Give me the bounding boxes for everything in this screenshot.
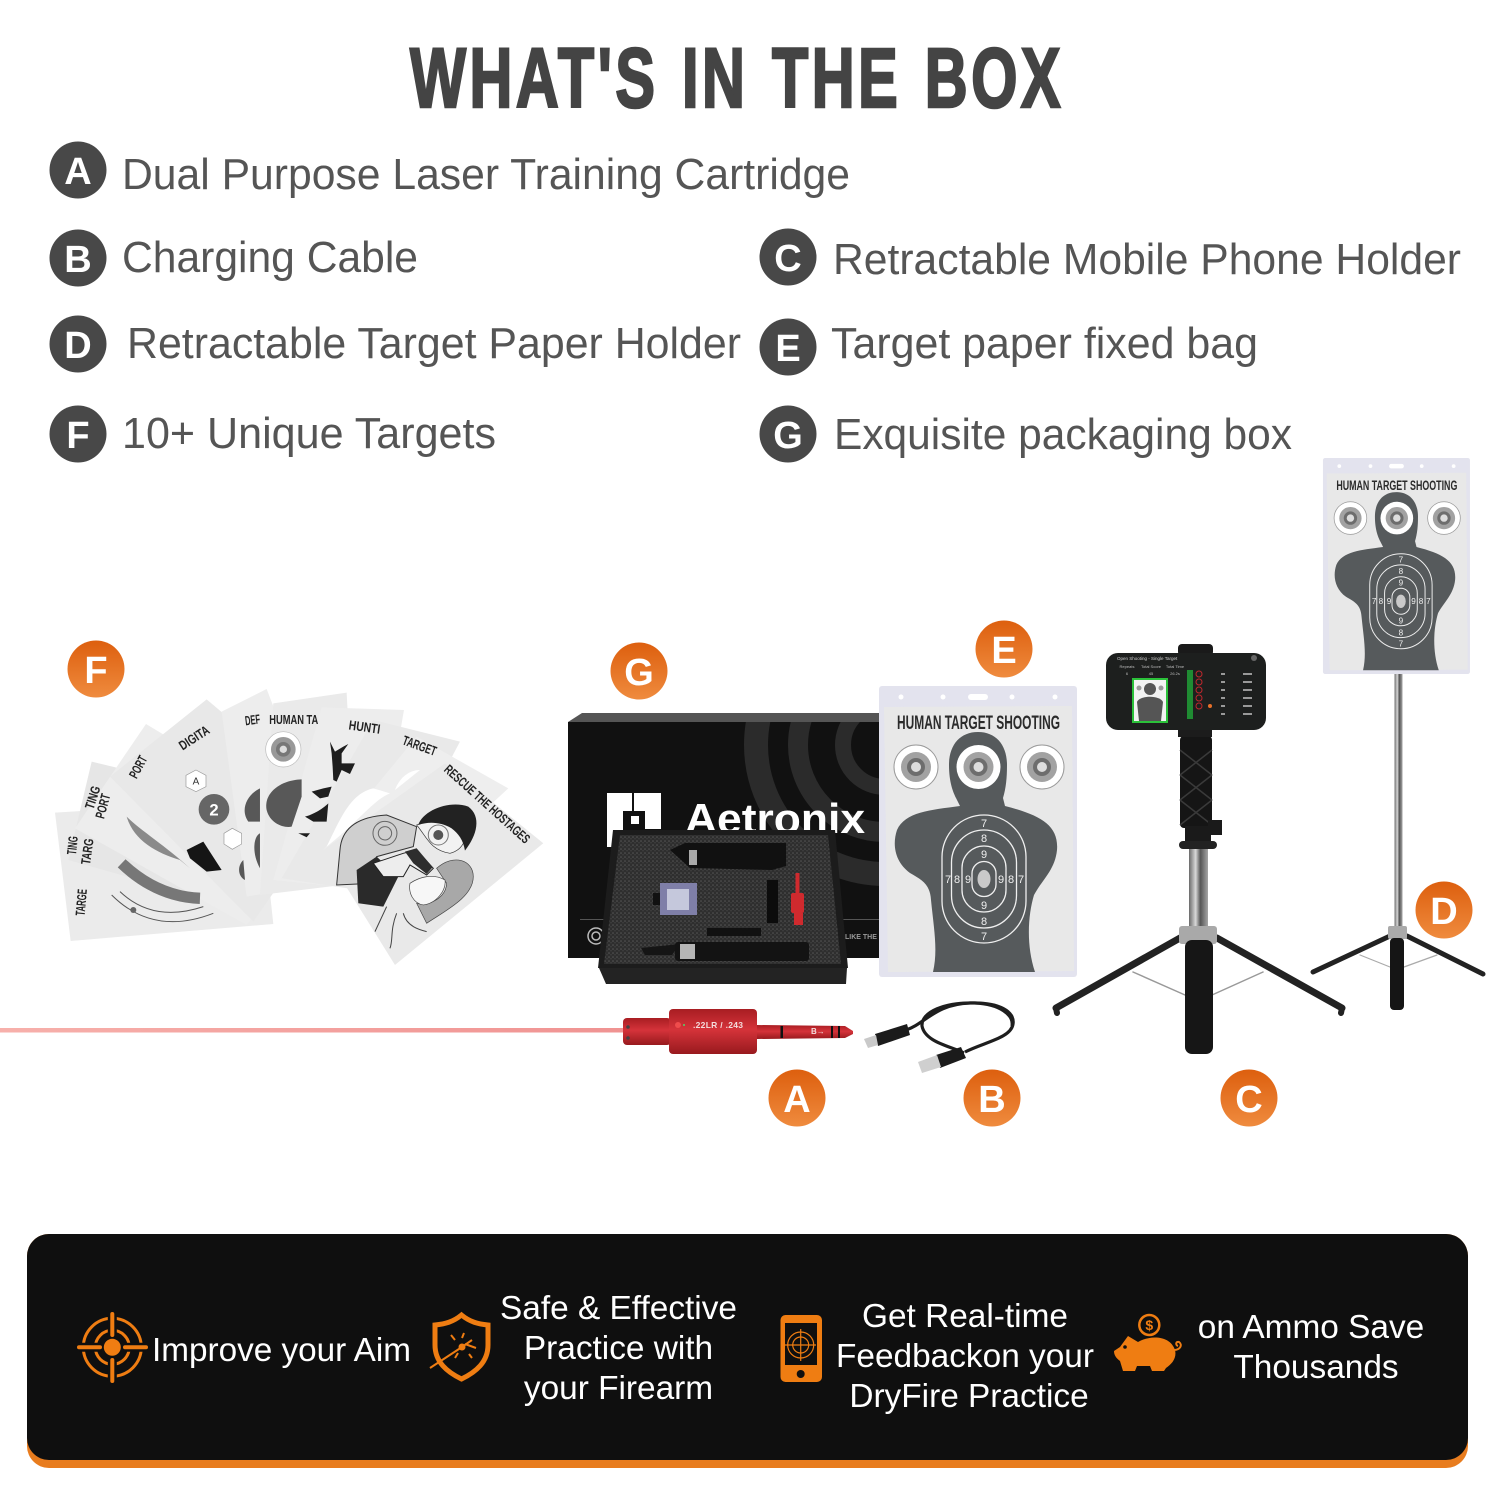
numbered hexagons — [186, 770, 242, 849]
benefit text: improve aim: Improve your Aim — [152, 1332, 411, 1369]
item C badge — [760, 228, 816, 286]
panel: benefits bar — [27, 1234, 1468, 1468]
E: target in fixed bag: 9 — [981, 900, 987, 912]
target on the stand — [1323, 458, 1470, 674]
target on the stand: 8 — [1399, 567, 1404, 576]
E: target in fixed bag: 7 — [945, 874, 951, 886]
benefit text: real-time feedback: Feedbackon your — [836, 1338, 1094, 1375]
card titles: TARGET — [401, 733, 439, 759]
target on the stand: 9 — [1399, 579, 1404, 588]
E: target in fixed bag: 8 — [954, 874, 960, 886]
item B badge: B — [64, 239, 92, 281]
E: target in fixed bag: 9 — [981, 849, 987, 861]
item E badge — [760, 318, 816, 376]
target on the stand: 7 — [1399, 556, 1404, 565]
card titles: PORT — [92, 792, 113, 820]
silhouettes — [239, 788, 260, 880]
target on the stand: 8 — [1399, 628, 1404, 637]
numbered hexagons: 2 — [209, 800, 219, 819]
item A text: Dual Purpose Laser Training Cartridge — [122, 150, 850, 199]
benefit text: ammo savings: on Ammo Save — [1198, 1309, 1424, 1346]
cable in tray — [767, 880, 778, 923]
grip — [1179, 736, 1222, 849]
collar — [1179, 926, 1217, 944]
target on the stand: 8 — [1419, 597, 1424, 606]
icon: piggy bank: $ — [1145, 1317, 1153, 1333]
phone: Repeats — [1120, 664, 1134, 669]
item F badge: F — [66, 415, 90, 457]
steel pole — [1189, 849, 1208, 927]
E: target in fixed bag: 9 — [998, 874, 1004, 886]
item E text: Target paper fixed bag — [831, 319, 1258, 368]
benefit text: safe and effective: Practice with — [524, 1330, 713, 1367]
benefit text: real-time feedback: Get Real-time — [862, 1298, 1068, 1335]
target on the stand: 9 — [1387, 597, 1392, 606]
badge G: G — [624, 652, 654, 694]
benefit text: real-time feedback: DryFire Practice — [849, 1378, 1089, 1415]
icon: phone with target — [780, 1315, 822, 1382]
phone — [1106, 644, 1266, 737]
E: target in fixed bag: 7 — [981, 931, 987, 943]
item F text: 10+ Unique Targets — [122, 409, 496, 458]
telescopic pole — [1394, 673, 1402, 928]
feather hair — [127, 817, 190, 868]
benefit text: safe and effective: your Firearm — [524, 1370, 713, 1407]
benefit text: safe and effective: Safe & Effective — [500, 1290, 737, 1327]
black shape — [187, 842, 222, 872]
E: target in fixed bag: HUMAN TARGET SHOOTING — [897, 713, 1060, 734]
target on the stand: 9 — [1399, 617, 1404, 626]
callout badges — [68, 620, 1472, 1126]
F: fan of paper targets — [55, 689, 543, 965]
brand name: Aetronix — [685, 795, 866, 842]
front card — [323, 763, 543, 965]
item D text: Retractable Target Paper Holder — [127, 319, 741, 368]
badge B — [964, 1070, 1020, 1126]
E: target in fixed bag: 9 — [965, 874, 971, 886]
phone: 45 — [1149, 671, 1154, 676]
fixed bag in tray — [653, 883, 697, 915]
E: target in fixed bag — [879, 686, 1077, 977]
target on the stand: 7 — [1372, 597, 1377, 606]
dial target — [112, 863, 213, 922]
card titles: DIGITA — [176, 722, 212, 753]
benefit text: ammo savings — [1198, 1309, 1424, 1386]
target on the stand: 9 — [1411, 597, 1416, 606]
numbered hexagons: A — [193, 777, 200, 788]
E: target in fixed bag: 8 — [981, 916, 987, 928]
badge B: B — [978, 1079, 1006, 1121]
title: WHAT'S IN THE BOX — [410, 31, 1064, 125]
card titles: TARGE — [73, 888, 90, 916]
badge D — [1416, 882, 1472, 938]
E: target in fixed bag: 8 — [1008, 874, 1014, 886]
A: red laser cartridge: .22LR / .243 — [693, 1020, 743, 1030]
item G badge: G — [773, 415, 803, 457]
card titles: HUMAN TA — [269, 712, 319, 727]
phone screen target — [1132, 678, 1168, 723]
item A badge — [50, 142, 106, 198]
icon: piggy bank — [1114, 1315, 1181, 1371]
deer and birds — [298, 742, 355, 837]
card titles: RESCUE THE HOSTAGES — [441, 762, 533, 847]
card titles: HUNTI — [348, 717, 381, 737]
small ring target — [266, 732, 301, 767]
badge D: D — [1430, 891, 1458, 933]
card titles — [64, 712, 533, 916]
item C badge: C — [774, 238, 802, 280]
open tray — [598, 830, 848, 984]
target holder in tray — [641, 928, 809, 961]
target on the stand: 7 — [1426, 597, 1431, 606]
item D badge — [50, 316, 106, 372]
item list — [50, 142, 1461, 462]
item G badge — [760, 406, 816, 462]
card titles: DEF — [244, 712, 261, 728]
badge E — [976, 620, 1032, 678]
E: target in fixed bag: 7 — [981, 818, 987, 830]
G: packaging box — [568, 713, 879, 984]
laser beam — [0, 1028, 626, 1032]
item F badge — [50, 406, 106, 462]
card titles: TING — [64, 835, 81, 855]
logo mark — [607, 793, 661, 847]
badge C: C — [1235, 1079, 1263, 1121]
A: red laser cartridge: B→ — [811, 1027, 825, 1036]
item B text: Charging Cable — [122, 233, 418, 282]
badge C — [1220, 1070, 1278, 1126]
phone: 6 — [1126, 671, 1129, 676]
box tagline: LIKE THE PRO — [845, 934, 895, 941]
benefit text: ammo savings: Thousands — [1233, 1349, 1399, 1386]
card titles: TING — [82, 784, 103, 811]
item B badge — [50, 230, 106, 286]
icon: crosshair — [79, 1314, 146, 1381]
item C text: Retractable Mobile Phone Holder — [833, 235, 1461, 284]
box target icon — [588, 928, 604, 944]
D: target paper holder tripod — [1313, 458, 1483, 1010]
E: target in fixed bag: 8 — [981, 833, 987, 845]
phone: 26.2s — [1170, 671, 1180, 676]
C: phone holder tripod — [1056, 644, 1342, 1054]
handle — [1390, 938, 1404, 1010]
badge G — [610, 642, 668, 700]
benefit text: safe and effective — [500, 1290, 737, 1407]
cartridge in tray — [791, 873, 804, 925]
handle — [1185, 940, 1213, 1054]
B: USB charging cable — [864, 1003, 1013, 1073]
box rings — [744, 722, 879, 886]
badge A: A — [783, 1079, 811, 1121]
benefit text: real-time feedback — [836, 1298, 1094, 1415]
phone: Total Time — [1166, 664, 1185, 669]
badge A — [768, 1070, 826, 1126]
phone: Open Shooting - Single Target — [1117, 656, 1178, 661]
item A badge: A — [64, 151, 92, 193]
item D badge: D — [64, 325, 92, 367]
E: target in fixed bag: 7 — [1018, 874, 1024, 886]
front card illustration — [337, 805, 476, 948]
item E badge: E — [775, 328, 801, 370]
A: red laser cartridge — [623, 1009, 853, 1054]
item G text: Exquisite packaging box — [834, 410, 1292, 459]
badge E: E — [991, 630, 1017, 672]
target on the stand: 8 — [1379, 597, 1384, 606]
tripod legs — [1056, 938, 1342, 1013]
badge F: F — [84, 650, 108, 692]
icon: shield with laser — [430, 1315, 488, 1379]
badge F — [68, 640, 124, 698]
white curved shapes — [327, 770, 420, 847]
card titles: PORT — [126, 753, 150, 781]
card titles: TARG — [78, 838, 97, 865]
target on the stand: 7 — [1399, 640, 1404, 649]
phone holder in tray — [670, 843, 786, 870]
phone: Total Score — [1141, 664, 1162, 669]
